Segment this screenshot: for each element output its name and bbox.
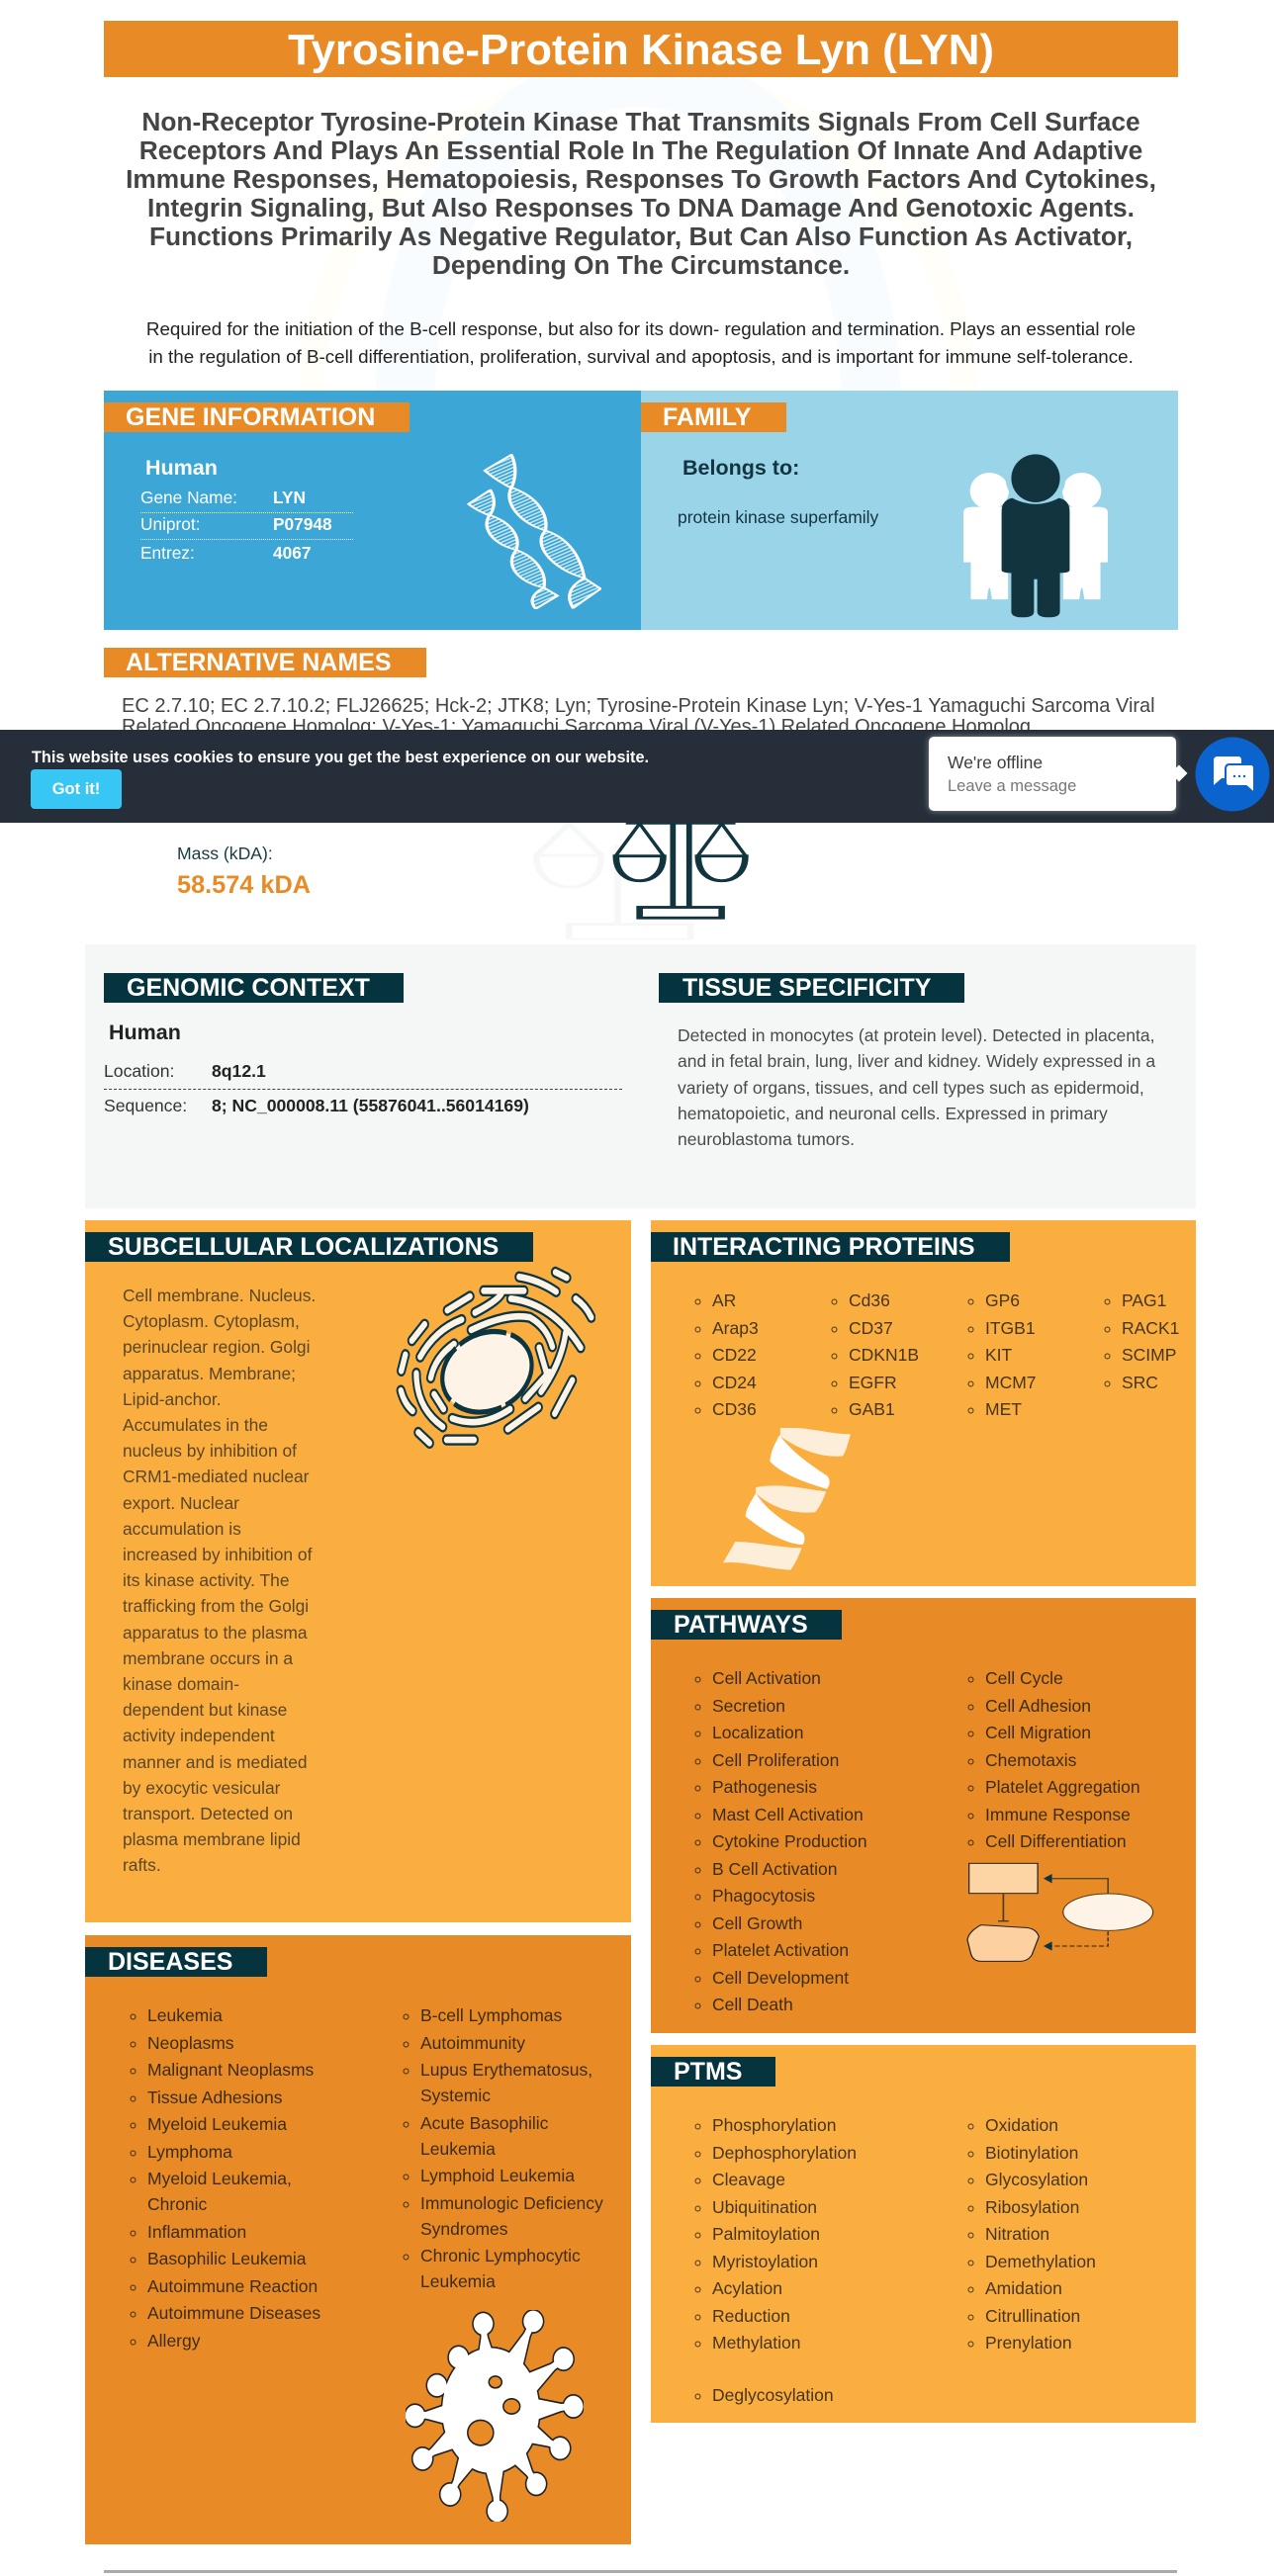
subtitle: Receptors And Plays An Essential Role In The Regulation Of Innate And Adaptive [139,134,1142,164]
list column 1: Neoplasms [147,2033,234,2053]
gene name row: Gene Name: [140,488,237,507]
list column 1: Myeloid Leukemia, [147,2169,292,2188]
location row: Location: [104,1061,174,1081]
list column 1: Cleavage [712,2170,785,2189]
subtitle [126,107,1156,279]
list column 3: MCM7 [985,1373,1037,1392]
list column 2: GAB1 [849,1399,895,1419]
list column 2: Leukemia [420,2138,496,2158]
chat status: We're offline [948,753,1043,772]
family name: protein kinase superfamily [678,507,878,527]
list column 2: Cd36 [849,1290,890,1310]
list column 2: Cell Adhesion [985,1695,1091,1715]
alternative names text [122,695,1155,738]
tissue specificity text [678,1025,1155,1149]
list column 2: CDKN1B [849,1345,919,1365]
icon: golgi apparatus [396,1266,595,1449]
list column 1: Secretion [712,1695,785,1715]
list column 1: Pathogenesis [712,1777,817,1797]
mass label: Mass (kDA): [177,844,273,863]
list column 1: B Cell Activation [712,1859,837,1879]
sequence row: Sequence: [104,1096,187,1115]
title: Tyrosine-Protein Kinase Lyn (LYN) [288,26,994,74]
list column 2: Cell Differentiation [985,1831,1127,1851]
got it button [31,769,122,809]
subcellular text: trafficking from the Golgi [123,1596,309,1616]
subcellular text: membrane occurs in a [123,1648,293,1668]
subcellular text: Lipid-anchor. [123,1389,222,1409]
icon: people [963,454,1108,617]
list column 1: Phosphorylation [712,2115,837,2135]
list column 1: Phagocytosis [712,1886,815,1906]
cookie bar [0,730,1274,823]
list column 1: Cell Activation [712,1668,821,1688]
list column 2: Cell Migration [985,1723,1091,1742]
list column 1: Chronic [147,2194,207,2214]
subtitle: Functions Primarily As Negative Regulator, But Can Also Function As Activator, [149,222,1133,251]
subcellular text: plasma membrane lipid [123,1829,301,1849]
list extra item: Deglycosylation [712,2385,834,2405]
list column 2: Lymphoid Leukemia [420,2166,575,2185]
heading: diseases: DISEASES [108,1948,232,1976]
chat bubble pointer [1171,765,1187,781]
list column 1: Cell Growth [712,1912,802,1932]
heading: pathways [651,1610,842,1640]
mass value: 58.574 kDA [177,870,311,898]
list column 1: Palmitoylation [712,2224,820,2244]
title [104,21,1178,77]
subcellular text: perinuclear region. Golgi [123,1337,310,1357]
panel: subcellular localizations [85,1220,631,1922]
list column 2 [831,1290,919,1419]
list column 1 [131,2005,320,2350]
chat offline bubble [929,737,1176,811]
list column 1 [694,2115,857,2353]
heading: family: FAMILY [663,403,751,431]
subcellular text: Cell membrane. Nucleus. [123,1286,316,1305]
subcellular text: Cytoplasm. Cytoplasm, [123,1311,300,1331]
subcellular text: accumulation is [123,1519,241,1539]
subcellular text [123,1286,316,1875]
sequence row [104,1096,529,1115]
uniprot row: Uniprot: [140,514,201,534]
list column 1: Autoimmune Diseases [147,2303,320,2323]
list column 2: Immune Response [985,1804,1131,1823]
list column 1: Basophilic Leukemia [147,2249,307,2268]
list column 3 [967,1290,1037,1419]
list column 2: Nitration [985,2224,1049,2244]
list column 1: Acylation [712,2278,782,2298]
panel: gene information [104,391,641,630]
list column 1: Myeloid Leukemia [147,2114,287,2134]
subtitle: Integrin Signaling, But Also Responses To DNA Damage And Genotoxic Agents. [147,192,1135,222]
uniprot row: P07948 [273,514,332,534]
list column 3: MET [985,1399,1022,1419]
list column 3: GP6 [985,1290,1020,1310]
list column 2: Platelet Aggregation [985,1777,1140,1797]
heading: diseases [85,1947,267,1977]
subcellular text: its kinase activity. The [123,1570,289,1590]
icon: pathway diagram [966,1863,1153,1962]
list column 2: Lupus Erythematosus, [420,2060,592,2080]
panel: ptms [651,2045,1196,2423]
species: Human [145,456,218,480]
alternative names text: Related Oncogene Homolog; V-Yes-1; Yamaguchi Sarcoma Viral (V-Yes-1) Related Oncogene Homolog [122,716,1031,738]
location row [104,1061,266,1081]
description paragraph [146,318,1136,367]
list column 1: Autoimmune Reaction [147,2276,318,2296]
list column 1: Inflammation [147,2221,246,2241]
icon: protein ribbon [723,1428,851,1570]
list column 1 [694,1668,867,2014]
heading: ptms: PTMS [674,2058,742,2086]
list column 1: Malignant Neoplasms [147,2060,314,2080]
list column 2: Ribosylation [985,2197,1079,2217]
tissue specificity text: hematopoietic, and neuronal cells. Expressed in primary [678,1104,1108,1123]
subcellular text: export. Nuclear [123,1493,239,1513]
cookie message: This website uses cookies to ensure you get the best experience on our website. [32,749,649,766]
description paragraph: in the regulation of B-cell differentiation, proliferation, survival and apoptosis, and is important for immune self-tolerance. [148,346,1134,367]
list column 2: Biotinylation [985,2142,1078,2162]
list column 1: Reduction [712,2306,790,2326]
list column 2: EGFR [849,1373,897,1392]
panel: pathways [651,1598,1196,2033]
list column 1: Ubiquitination [712,2197,817,2217]
icon: balance scale [533,823,749,939]
list column 1: CD36 [712,1399,757,1419]
panel: genomic context and tissue specificity: 8q12.1 [212,1061,266,1081]
list column 2 [404,2005,603,2291]
list column 2: Chronic Lymphocytic [420,2246,581,2265]
list column 1: Cell Proliferation [712,1750,839,1770]
icon: virus [406,2310,584,2522]
list column 1: Arap3 [712,1317,759,1337]
mass block [177,844,311,898]
list column 2: Cell Cycle [985,1668,1063,1688]
heading: interacting proteins: INTERACTING PROTEINS [673,1233,975,1261]
heading: ptms [651,2057,775,2087]
list column 1: Lymphoma [147,2142,232,2162]
description paragraph: Required for the initiation of the B-cell response, but also for its down- regulation and termination. Plays an essential role [146,318,1136,339]
list column 1: Tissue Adhesions [147,2087,283,2106]
list column 1: Cell Death [712,1995,793,2014]
panel: genomic context and tissue specificity: 8; NC_000008.11 (55876041..56014169) [212,1096,529,1115]
list column 2: Amidation [985,2278,1062,2298]
panel: diseases [85,1935,631,2544]
subcellular text: by exocytic vesicular [123,1778,280,1798]
list column 4: RACK1 [1122,1317,1179,1337]
subcellular text: CRM1-mediated nuclear [123,1466,309,1486]
heading: alternative names: ALTERNATIVE NAMES [126,649,392,676]
list column 2: Acute Basophilic [420,2112,548,2132]
icon: dna helix [467,454,601,609]
list column 2: Prenylation [985,2333,1072,2353]
list column 2: Oxidation [985,2115,1058,2135]
gene name row: LYN [273,488,306,507]
panel: genomic context and tissue specificity [85,944,1196,1208]
bottom rule [104,2570,1177,2573]
list column 2: Autoimmunity [420,2033,525,2053]
list column 2: Chemotaxis [985,1750,1076,1770]
subcellular text: dependent but kinase [123,1700,287,1720]
list column 1: CD24 [712,1373,757,1392]
list column 1: Cell Development [712,1968,849,1988]
list column 2: Citrullination [985,2306,1080,2326]
gene name row [140,486,353,513]
subtitle: Immune Responses, Hematopoiesis, Responses To Growth Factors And Cytokines, [126,164,1156,194]
belongs to heading: Belongs to: [682,456,799,480]
tissue specificity text: Detected in monocytes (at protein level). Detected in placenta, [678,1025,1154,1045]
list column 2: Syndromes [420,2219,508,2239]
list column 2 [967,1668,1140,1851]
subcellular text: rafts. [123,1855,161,1875]
list column 2: Glycosylation [985,2170,1088,2189]
list column 3: KIT [985,1345,1012,1365]
tissue specificity text: variety of organs, tissues, and cell types such as epidermoid, [678,1078,1144,1098]
subcellular text: activity independent [123,1726,275,1745]
list column 4: SCIMP [1122,1345,1176,1365]
list column 2: Leukemia [420,2271,496,2291]
entrez row: 4067 [273,543,311,563]
list column 1: Mast Cell Activation [712,1804,864,1823]
list column 4: PAG1 [1122,1290,1166,1310]
alternative names text: EC 2.7.10; EC 2.7.10.2; FLJ26625; Hck-2; JTK8; Lyn; Tyrosine-Protein Kinase Lyn; V-Yes-1 Yamaguchi Sarcoma Viral [122,695,1155,717]
list column 3: ITGB1 [985,1317,1036,1337]
list column 4 [1104,1290,1179,1392]
list column 1: Platelet Activation [712,1940,849,1960]
species: Human [109,1021,181,1044]
entrez row: Entrez: [140,543,195,563]
got it button: Got it! [52,779,100,797]
list column 1: CD22 [712,1345,757,1365]
heading: gene information: GENE INFORMATION [126,403,375,431]
subcellular text: Accumulates in the [123,1415,268,1435]
heading: genomic context: GENOMIC CONTEXT [127,974,370,1002]
subtitle: Non-Receptor Tyrosine-Protein Kinase That Transmits Signals From Cell Surface [141,107,1140,136]
subtitle: Depending On The Circumstance. [432,249,850,279]
heading: tissue specificity: TISSUE SPECIFICITY [682,974,931,1002]
list column 1: Methylation [712,2333,801,2353]
list column 1: Allergy [147,2330,200,2350]
decorative faint watermark [297,77,989,394]
heading: pathways: PATHWAYS [674,1611,808,1639]
list column 2: Systemic [420,2086,491,2105]
list column 2 [967,2115,1096,2353]
heading: family [641,402,786,432]
list column 1: Localization [712,1723,803,1742]
list column 2: B-cell Lymphomas [420,2005,562,2025]
list column 2: Demethylation [985,2251,1096,2270]
list column 2: Immunologic Deficiency [420,2193,603,2213]
list column 1: Dephosphorylation [712,2142,857,2162]
chat prompt: Leave a message [948,777,1076,795]
subcellular text: kinase domain- [123,1674,239,1694]
list column 1 [694,1290,759,1419]
subcellular text: manner and is mediated [123,1752,308,1772]
list column 1: Leukemia [147,2005,223,2025]
list column 1: Cytokine Production [712,1831,867,1851]
panel: family [641,391,1178,630]
subcellular text: apparatus. Membrane; [123,1364,296,1383]
subcellular text: increased by inhibition of [123,1545,312,1564]
icon: chat button [1195,738,1270,811]
entrez row [140,543,311,563]
list column 4: SRC [1122,1373,1158,1392]
list column 1: AR [712,1290,736,1310]
panel: alternative names [104,648,1155,738]
tissue specificity text: neuroblastoma tumors. [678,1129,855,1149]
list column 2: CD37 [849,1317,893,1337]
tissue specificity text: and in fetal brain, lung, liver and kidney. Widely expressed in a [678,1051,1155,1071]
subcellular text: apparatus to the plasma [123,1623,308,1643]
panel: interacting proteins [651,1220,1196,1586]
subcellular text: transport. Detected on [123,1804,293,1823]
list column 1: Myristoylation [712,2251,818,2270]
subcellular text: nucleus by inhibition of [123,1441,297,1461]
heading: subcellular localizations: SUBCELLULAR LOCALIZATIONS [108,1233,499,1261]
uniprot row [140,512,353,540]
